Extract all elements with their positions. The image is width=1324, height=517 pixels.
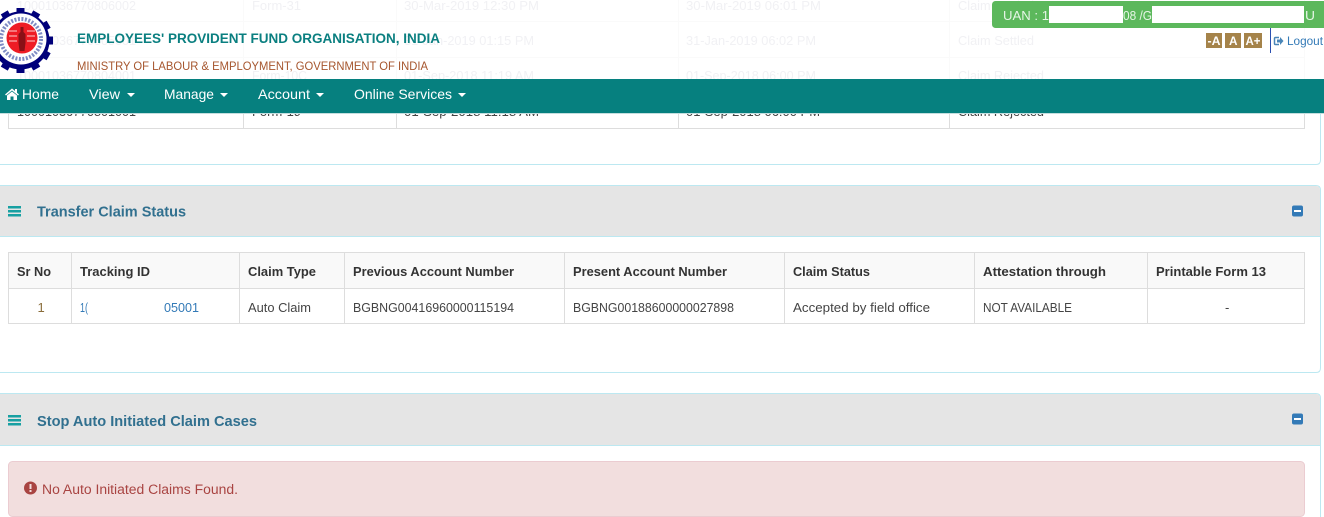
- table header row: Claim Type: [248, 264, 316, 279]
- table data row: BGBNG00188600000027898: [573, 300, 734, 315]
- menu: Manage: Manage: [164, 86, 214, 102]
- icon: collapse: [1292, 206, 1303, 216]
- logout link: [1270, 28, 1324, 53]
- clipped last row of claims table: Form-19: [252, 104, 301, 119]
- table data row: Auto Claim: [248, 300, 311, 315]
- faded background claims table behind the header: 01-Sep-2018 06:00 PM: [686, 68, 816, 83]
- table header row: Tracking ID: [80, 264, 150, 279]
- heading: Transfer Claim Status: [37, 204, 186, 220]
- faded background claims table behind the header: 31-Jan-2019 01:15 PM: [404, 33, 534, 48]
- font size controls: A: [1229, 34, 1238, 48]
- UAN badge: 08 /G: [1123, 8, 1152, 23]
- menu: Home: Home: [22, 86, 59, 102]
- table header row: [17, 264, 1266, 279]
- table header row: Printable Form 13: [1156, 264, 1266, 279]
- first panel bottom edge: [0, 113, 1320, 164]
- faded background claims table behind the header: 31-Jan-2019 06:02 PM: [686, 33, 816, 48]
- panel header: [0, 394, 1320, 446]
- table data row: 1: [38, 300, 45, 315]
- panel: Stop Auto Initiated Claim Cases: [0, 394, 1320, 517]
- menu: View: [89, 86, 135, 102]
- table data row: -: [1225, 300, 1229, 315]
- clipped last row of claims table: [8, 104, 1304, 128]
- clipped last row of claims table: Claim Rejected: [958, 104, 1044, 119]
- icon: home: [5, 88, 19, 100]
- faded background claims table behind the header: Claim Rejected: [958, 68, 1044, 83]
- faded background claims table behind the header: Form-10C: [252, 68, 307, 83]
- navigation bar: [0, 79, 1324, 114]
- font size controls: [1206, 33, 1262, 48]
- alert: no claims found: No Auto Initiated Claims Found.: [42, 482, 238, 497]
- table data row: BGBNG00416960000115194: [353, 300, 514, 315]
- logout link: Logout: [1287, 36, 1324, 48]
- clipped last row of claims table: 01-Sep-2018 11:18 AM: [404, 104, 539, 119]
- menu: Account: Account: [258, 86, 310, 102]
- table header row: Sr No: [17, 264, 51, 279]
- heading: Stop Auto Initiated Claim Cases: [37, 413, 257, 430]
- table header row: Claim Status: [793, 264, 870, 279]
- table data row: NOT AVAILABLE: [983, 300, 1072, 315]
- UAN badge: [992, 1, 1324, 28]
- table data row: Accepted by field office: [793, 300, 930, 315]
- icon: collapse: [1292, 414, 1303, 424]
- table header row: Attestation through: [983, 264, 1106, 279]
- table data row: 05001: [164, 300, 199, 315]
- table header row: Present Account Number: [573, 264, 727, 279]
- panel: Transfer Claim Status: [0, 186, 1320, 372]
- font size controls: A+: [1246, 34, 1260, 48]
- organisation title: EMPLOYEES' PROVIDENT FUND ORGANISATION, INDIA: [77, 31, 440, 46]
- clipped last row of claims table: 01-Sep-2018 06:00 PM: [686, 104, 820, 119]
- icon: EPFO logo: [0, 8, 53, 73]
- table header row: Previous Account Number: [353, 264, 514, 279]
- faded background claims table behind the header: 01-Sep-2018 11:19 AM: [404, 68, 534, 83]
- font size controls: -A: [1208, 34, 1221, 48]
- faded background claims table behind the header: 10001036770805001: [17, 33, 136, 48]
- icon: exclamation: [24, 482, 37, 494]
- table data row: [38, 300, 1229, 315]
- faded background claims table behind the header: [8, 0, 1305, 83]
- alert: no claims found: [8, 462, 1304, 516]
- table data row: 1(: [80, 300, 88, 315]
- icon: menu bars: [8, 206, 21, 216]
- panel header: [0, 186, 1320, 237]
- menu: Online Services: Online Services: [354, 86, 452, 102]
- ministry subtitle: MINISTRY OF LABOUR & EMPLOYMENT, GOVERNMENT OF INDIA: [77, 59, 428, 73]
- faded background claims table behind the header: Claim Settled: [958, 33, 1034, 48]
- faded background claims table behind the header: 10001036770804001: [17, 68, 136, 83]
- clipped last row of claims table: 10001036770801001: [17, 104, 136, 119]
- menu: View: View: [89, 86, 121, 102]
- UAN badge: UAN : 1: [1003, 8, 1049, 23]
- UAN badge: U: [1305, 8, 1315, 23]
- icon: menu bars: [8, 415, 21, 426]
- transfer claim table: [8, 252, 1304, 324]
